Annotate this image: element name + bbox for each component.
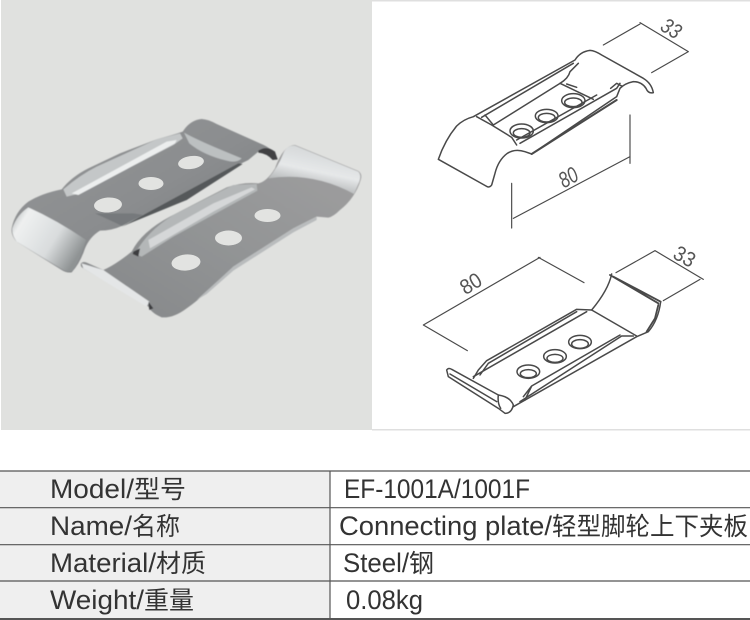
photo: upper plate	[12, 119, 278, 273]
row: weight: 0.08kg	[346, 585, 423, 615]
row: material	[50, 548, 434, 578]
photo: lower plate holes	[171, 209, 280, 272]
table rules	[0, 471, 750, 619]
drawing: upper plate with dimensions	[438, 14, 688, 228]
drawing: lower plate with dimensions	[423, 242, 703, 413]
row: name: 轻型脚轮上下夹板	[552, 513, 748, 541]
panel: technical drawings	[372, 0, 750, 430]
panel: product photo	[1, 0, 372, 430]
row: model: 型号	[134, 476, 186, 504]
panel bottom edge	[372, 429, 750, 430]
row: material: 钢	[409, 550, 434, 578]
row: name: 名称	[132, 513, 180, 541]
label column background	[0, 471, 330, 619]
dimension: 33: 33	[669, 242, 699, 273]
row: name: Name/	[50, 511, 133, 541]
row: model	[50, 474, 530, 504]
panel top edge	[372, 0, 750, 2]
row: weight: Weight/	[50, 585, 145, 615]
row: name: Connecting plate/	[339, 511, 552, 541]
row: material: Steel/	[343, 548, 409, 578]
dimension: 80: 80	[554, 163, 583, 194]
row: model: EF-1001A/1001F	[344, 474, 530, 504]
dimension: 80: 80	[456, 269, 486, 300]
row: model: Model/	[50, 474, 135, 504]
dimension: 33: 33	[656, 14, 686, 44]
photo: lower plate	[81, 145, 361, 317]
spec table	[0, 471, 750, 619]
row: weight	[50, 585, 423, 615]
row: material: Material/	[50, 548, 157, 578]
row: name	[50, 511, 748, 541]
row: weight: 重量	[144, 587, 194, 615]
row: material: 材质	[156, 550, 206, 578]
photo: upper plate holes	[94, 154, 205, 213]
